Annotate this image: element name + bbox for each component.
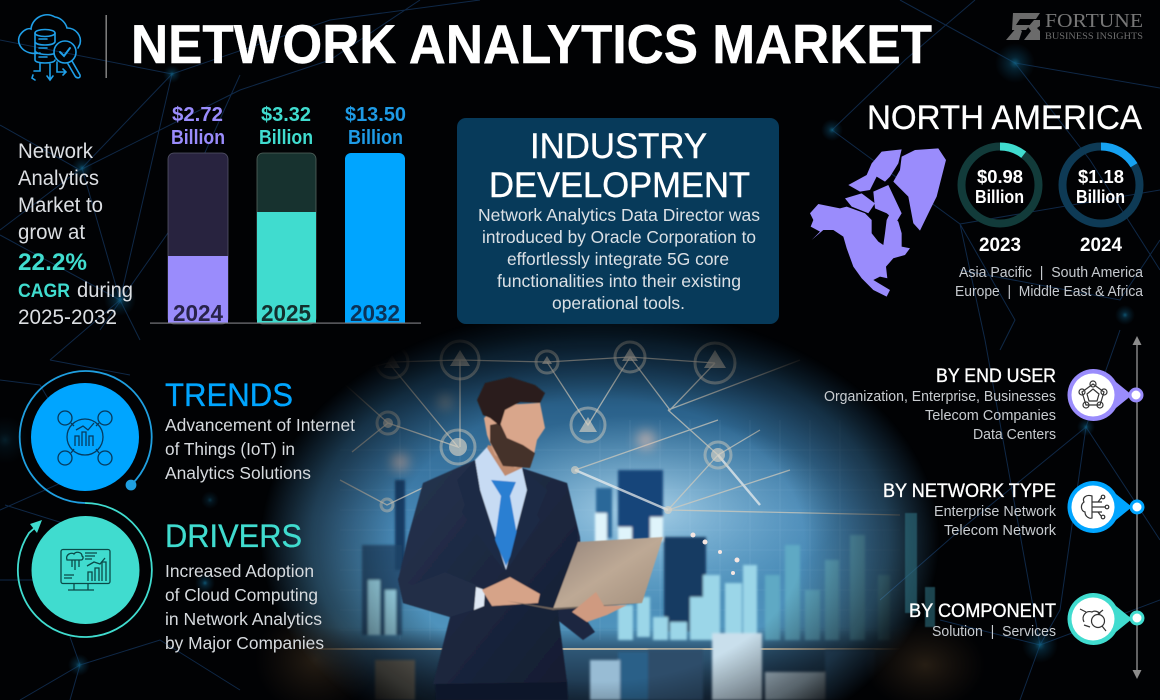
near forearm [398, 572, 483, 617]
panel heading: INDUSTRY [530, 127, 707, 166]
bar 2025: Billion [259, 127, 313, 149]
segment: by end user [824, 366, 1142, 443]
donut: 2024: $1.18 [1078, 167, 1124, 187]
title: NETWORK ANALYTICS MARKET [131, 13, 932, 75]
segment: by network type: Telecom Network [944, 523, 1057, 539]
shirt cuff [474, 587, 485, 610]
map: North America [810, 148, 946, 297]
panel: industry development [457, 118, 779, 324]
photo: businessman with laptop [398, 377, 663, 700]
drivers text: of Cloud Computing [165, 585, 318, 605]
logo: Fortune Business Insights [1006, 10, 1143, 42]
faint chart bars fading on the right [905, 513, 935, 627]
jacket [398, 460, 578, 684]
donut: 2023: $0.98 [977, 167, 1023, 187]
other regions text: Europe | Middle East & Africa [955, 284, 1144, 300]
panel body text: effortlessly integrate 5G core [507, 249, 729, 269]
CAGR text block: during [77, 279, 133, 302]
lapels [457, 460, 547, 572]
CAGR text block: 2025-2032 [18, 306, 117, 329]
CAGR text block: Network [18, 140, 93, 163]
beard [490, 423, 535, 468]
heading: drivers: DRIVERS [165, 518, 302, 554]
CAGR text block: Market to [18, 194, 103, 217]
city [375, 633, 875, 700]
neck [487, 445, 525, 476]
bar 2024: Billion [171, 127, 225, 149]
network overlay [340, 357, 900, 515]
segment: by network type: Enterprise Network [934, 504, 1057, 520]
pin: end user [1067, 369, 1142, 421]
donut: 2023: 2023 [979, 235, 1021, 256]
typing hand [482, 577, 540, 606]
donut: 2024 [1062, 146, 1140, 256]
photo backdrop: city, charts and network [266, 324, 934, 700]
segment: by end user: BY END USER [936, 366, 1056, 387]
panel body text: introduced by Oracle Corporation to [482, 227, 756, 247]
segment: by component [909, 593, 1143, 645]
ring connector: trends [20, 371, 152, 503]
bar 2025: $3.32 [261, 104, 311, 126]
bar 2032: $13.50 [345, 104, 406, 126]
donut: 2024: Billion [1076, 187, 1125, 207]
panel heading: DEVELOPMENT [489, 166, 750, 205]
donut: 2023: Billion [975, 187, 1024, 207]
drivers text: by Major Companies [165, 633, 324, 653]
segment: by end user: Organization, Enterprise, Businesses [824, 389, 1056, 405]
trends text: Advancement of Internet [165, 415, 355, 435]
trends text [165, 415, 355, 483]
laptop [553, 537, 663, 609]
bar 2024: $2.72 [172, 104, 223, 126]
bar 2025 [257, 104, 316, 326]
segment: by network type [883, 481, 1143, 539]
heading: North America: NORTH AMERICA [867, 99, 1142, 137]
segment: by component: BY COMPONENT [909, 601, 1056, 622]
segment: by network type: BY NETWORK TYPE [883, 481, 1056, 502]
CAGR text block: grow at [18, 221, 85, 244]
CAGR text block: Analytics [18, 167, 99, 190]
brand icon: cloud database with magnifier [19, 15, 80, 80]
header divider [106, 15, 107, 78]
hair [477, 377, 545, 426]
icon: monitor with cloud and chart [61, 550, 110, 590]
bar 2032: 2032 [350, 300, 400, 326]
bar 2025: 2025 [261, 300, 311, 326]
circle: drivers icon [32, 516, 140, 624]
donut: 2024: 2024 [1080, 235, 1122, 256]
icon: analytics people [58, 411, 112, 465]
panel heading [489, 127, 750, 205]
heading: trends: TRENDS [165, 377, 293, 413]
bar 2024: 2024 [173, 300, 223, 326]
panel body text: operational tools. [552, 293, 685, 313]
circle: trends icon [31, 383, 139, 491]
bar 2024 [168, 104, 228, 326]
trends text: Analytics Solutions [165, 463, 311, 483]
grid [381, 420, 840, 640]
head [484, 403, 545, 468]
logo: Fortune Business Insights: BUSINESS INSIGHTS [1045, 32, 1143, 42]
panel body text [478, 205, 760, 313]
CAGR text block: 22.2% [18, 249, 87, 276]
segment: by end user: Telecom Companies [925, 408, 1056, 424]
shirt [475, 447, 527, 570]
pin: network type [1067, 481, 1143, 533]
pin: component [1067, 593, 1143, 645]
tie [491, 480, 518, 566]
trends text: of Things (IoT) in [165, 439, 295, 459]
drivers text [165, 561, 324, 653]
panel body text: Network Analytics Data Director was [478, 205, 760, 225]
donut: 2023 [962, 146, 1038, 256]
other regions text: Asia Pacific | South America [959, 265, 1144, 281]
panel body text: functionalities into their existing [497, 271, 741, 291]
segment: by end user: Data Centers [973, 427, 1056, 443]
holding hand [572, 592, 627, 622]
drivers text: Increased Adoption [165, 561, 314, 581]
logo: Fortune Business Insights: FORTUNE [1045, 10, 1143, 32]
bar 2032 [345, 104, 406, 326]
bar 2032: Billion [348, 127, 403, 149]
drivers text: in Network Analytics [165, 609, 322, 629]
CAGR text block [18, 140, 133, 329]
ring connector: drivers [18, 503, 152, 637]
dark towers and bars [362, 470, 890, 640]
segment axis arrow [1132, 336, 1142, 679]
far sleeve [545, 483, 595, 640]
bar chart: market size [150, 104, 421, 326]
other regions text [955, 265, 1144, 300]
horizon [300, 648, 920, 650]
trousers [435, 680, 568, 700]
CAGR text block: CAGR [18, 281, 70, 302]
segment: by component: Solution | Services [932, 624, 1056, 640]
